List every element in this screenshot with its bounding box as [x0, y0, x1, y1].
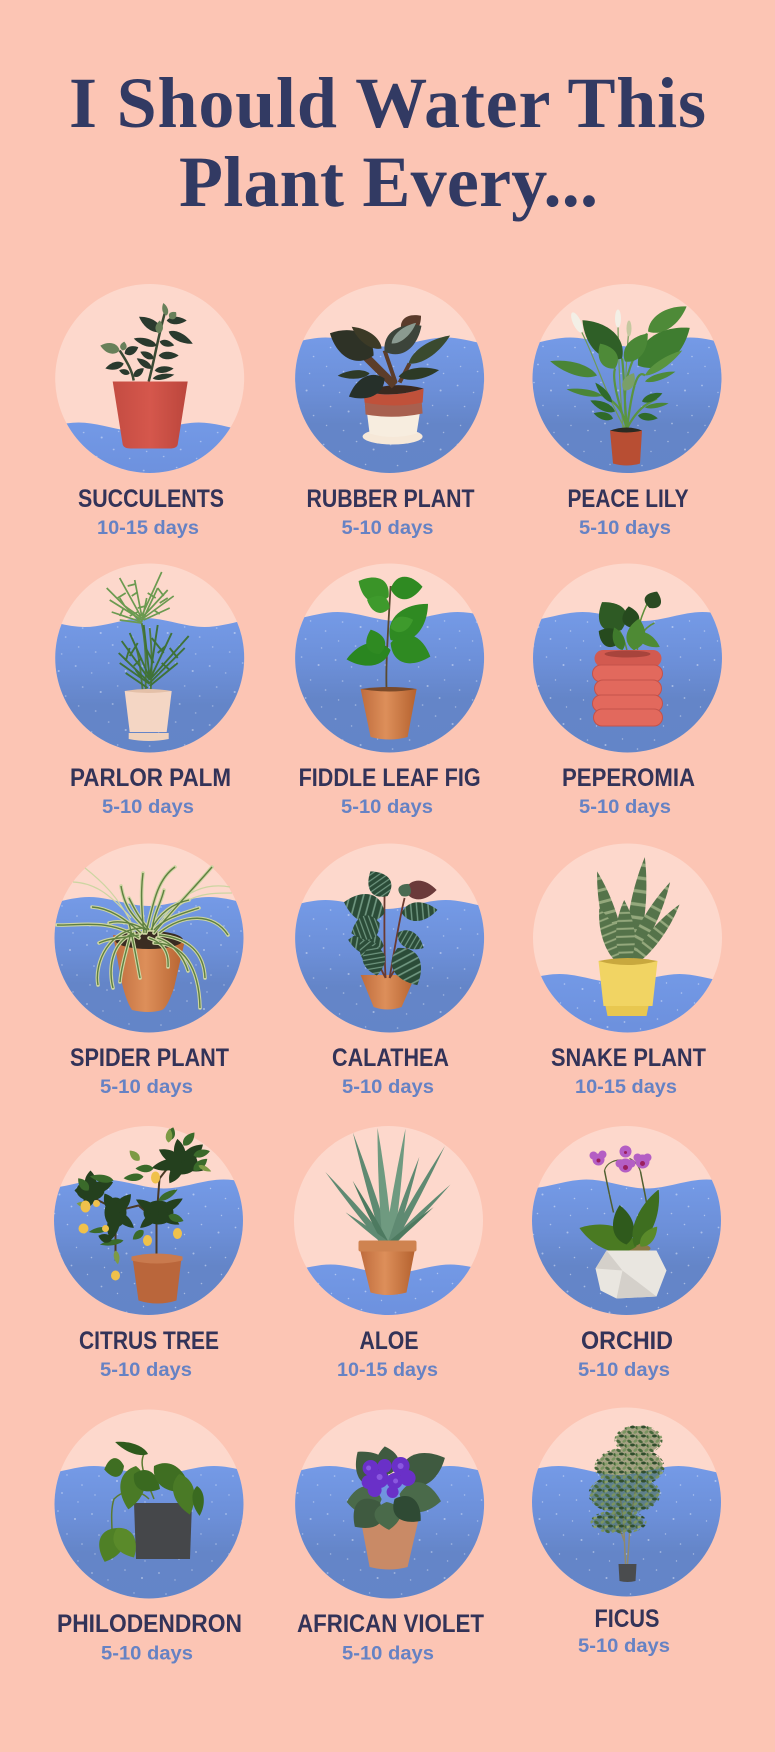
- days: philodendron: 5-10 days: [101, 1642, 193, 1664]
- title: Plant Every...: [179, 142, 598, 222]
- plant badge: citrus tree: [54, 1126, 243, 1315]
- days: orchid: 5-10 days: [578, 1359, 670, 1381]
- name: snake plant: SNAKE PLANT: [551, 1044, 706, 1072]
- panel: peperomia: [533, 564, 722, 817]
- plant badge: parlor palm: [55, 564, 244, 752]
- days: spider plant: 5-10 days: [100, 1076, 193, 1098]
- name: parlor palm: PARLOR PALM: [70, 764, 231, 792]
- days: african violet: 5-10 days: [342, 1642, 434, 1664]
- days: parlor palm: 5-10 days: [102, 796, 194, 818]
- plant badge: rubber plant: [295, 284, 484, 473]
- panel: succulents: [55, 284, 244, 538]
- panel: fiddle leaf fig: [295, 564, 484, 817]
- panel: spider plant: [54, 844, 244, 1097]
- plant badge: peace lily: [532, 284, 722, 473]
- days: fiddle leaf fig: 5-10 days: [341, 796, 433, 818]
- name: fiddle leaf fig: FIDDLE LEAF FIG: [299, 764, 481, 792]
- plant badge: philodendron: [54, 1410, 244, 1598]
- name: peace lily: PEACE LILY: [568, 485, 689, 513]
- panel: african violet: [295, 1410, 484, 1664]
- panel: philodendron: [54, 1410, 244, 1664]
- days: peace lily: 5-10 days: [579, 517, 671, 539]
- plant badge: snake plant: [533, 844, 722, 1032]
- days: succulents: 10-15 days: [97, 517, 199, 539]
- name: orchid: ORCHID: [581, 1327, 673, 1355]
- plant badge: aloe: [294, 1126, 483, 1315]
- title: I Should Water This: [69, 63, 706, 143]
- panel: citrus tree: [54, 1126, 243, 1380]
- name: spider plant: SPIDER PLANT: [70, 1044, 229, 1072]
- name: rubber plant: RUBBER PLANT: [306, 485, 474, 513]
- panel: aloe: [294, 1126, 483, 1380]
- name: calathea: CALATHEA: [332, 1044, 449, 1072]
- name: philodendron: PHILODENDRON: [57, 1610, 242, 1638]
- plant badge: ficus: [532, 1408, 721, 1596]
- plant badge: succulents: [55, 284, 244, 473]
- panel: snake plant: [533, 844, 722, 1097]
- panel: orchid: [532, 1126, 721, 1380]
- plant badge: orchid: [532, 1126, 721, 1315]
- days: snake plant: 10-15 days: [575, 1076, 677, 1098]
- panel: calathea: [295, 844, 484, 1097]
- name: succulents: SUCCULENTS: [78, 485, 224, 513]
- days: ficus: 5-10 days: [578, 1635, 670, 1657]
- name: citrus tree: CITRUS TREE: [79, 1327, 219, 1355]
- panel: rubber plant: [295, 284, 484, 538]
- plant badge: fiddle leaf fig: [295, 564, 484, 752]
- days: rubber plant: 5-10 days: [342, 517, 434, 539]
- days: aloe: 10-15 days: [337, 1359, 438, 1381]
- days: peperomia: 5-10 days: [579, 796, 671, 818]
- name: african violet: AFRICAN VIOLET: [297, 1610, 484, 1638]
- title: [69, 63, 706, 222]
- panel: peace lily: [532, 284, 722, 538]
- days: calathea: 5-10 days: [342, 1076, 434, 1098]
- plant badge: african violet: [295, 1410, 484, 1598]
- panel: parlor palm: [55, 564, 244, 817]
- plant badge: calathea: [295, 844, 484, 1032]
- days: citrus tree: 5-10 days: [100, 1359, 192, 1381]
- name: aloe: ALOE: [360, 1327, 418, 1355]
- panel: ficus: [532, 1408, 721, 1656]
- plant badge: spider plant: [54, 844, 244, 1032]
- name: ficus: FICUS: [594, 1605, 660, 1633]
- name: peperomia: PEPEROMIA: [562, 764, 695, 792]
- plant badge: peperomia: [533, 564, 722, 752]
